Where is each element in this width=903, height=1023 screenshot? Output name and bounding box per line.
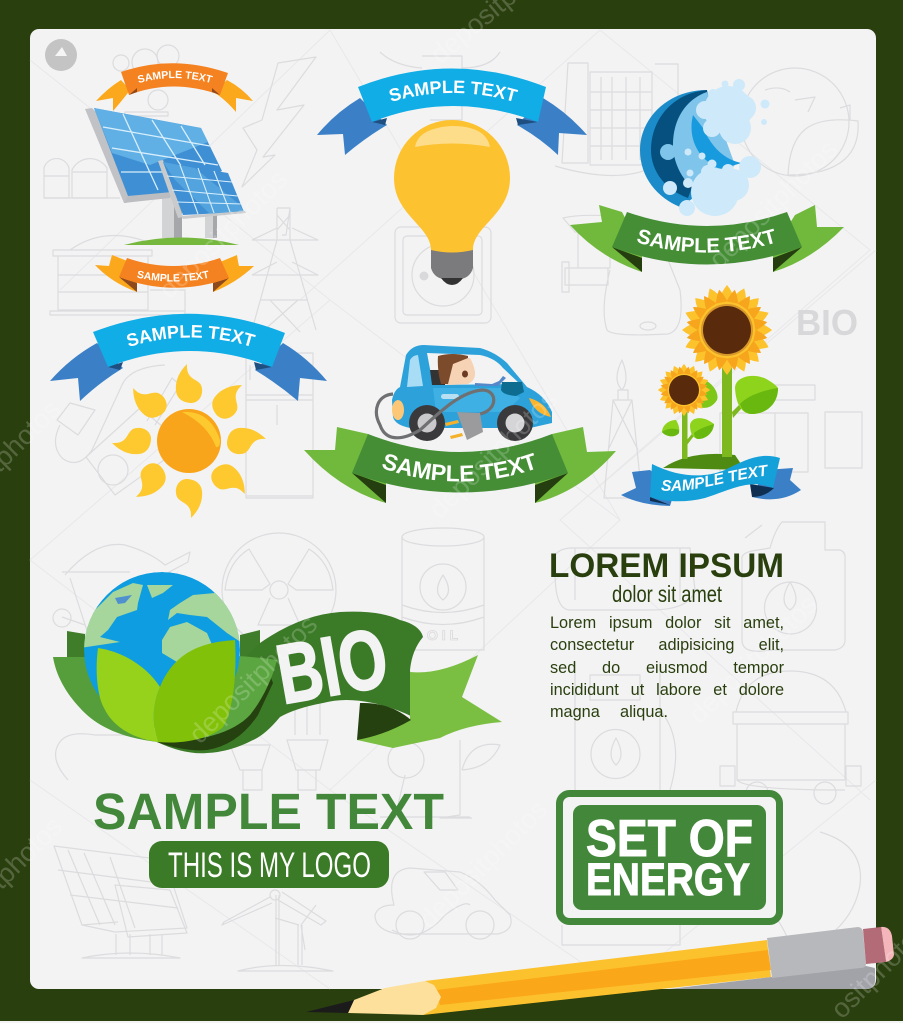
line art: compact bulb and spiral lamps [230, 660, 328, 790]
icon: electric car [376, 345, 552, 441]
ribbon: lower orange: SAMPLE TEXT [137, 270, 208, 282]
ribbon: top orange: SAMPLE TEXT [138, 70, 213, 82]
ribbon: top blue: SAMPLE TEXT [389, 80, 518, 101]
foam bubbles [663, 79, 770, 216]
ribbon tail [357, 655, 502, 748]
line art: wall socket [395, 227, 491, 323]
door handle [441, 394, 459, 399]
line art: big bulb outline [562, 832, 860, 945]
ribbon: center green: SAMPLE TEXT [382, 452, 534, 482]
line art: oil barrel [402, 528, 484, 650]
line art: radiation symbol [222, 533, 336, 647]
icon: sun [112, 364, 266, 518]
line art: factory building [555, 63, 678, 176]
watermark text: depositphotos [703, 134, 843, 274]
left and right wings [53, 657, 158, 742]
ribbon: center green [304, 427, 616, 503]
front window [427, 353, 520, 385]
ferrule [767, 927, 866, 978]
line art: plug and power strip [55, 365, 185, 495]
watermark text: depositphotos [423, 384, 563, 524]
sun rays [176, 364, 202, 403]
line art: grinder machine [562, 215, 681, 335]
ribbon: lower orange [95, 255, 254, 292]
watermark text: depositphotos [413, 794, 553, 934]
line art: fuel pump [575, 662, 676, 815]
body text block: incididunt ut labore et dolore [550, 681, 784, 699]
line art: solar panel outline [54, 846, 187, 958]
ribbon: top green [570, 205, 844, 272]
wave layers [640, 90, 720, 207]
lights [392, 400, 404, 420]
icon: sunflowers [658, 285, 778, 470]
pencil [306, 927, 894, 1015]
ribbon: top green: SAMPLE TEXT [637, 228, 774, 253]
ribbon: left blue [50, 314, 327, 401]
line art: oil barrel: OIL [427, 627, 458, 643]
body text block: consectetur adipisicing elit, [550, 636, 784, 654]
ground [124, 238, 239, 245]
eraser [863, 927, 886, 964]
driver [430, 354, 506, 386]
heading: lorem ipsum: LOREM IPSUM [549, 547, 784, 585]
leaves [735, 376, 778, 414]
line art: canister [553, 522, 845, 651]
watermark text: depositphotos [153, 164, 293, 304]
charging cable and plug [376, 390, 494, 438]
side tabs [67, 630, 260, 658]
line art: pylon [252, 208, 318, 332]
line art: globe with leaf [741, 68, 858, 176]
line art: gas station bits [604, 360, 862, 498]
icon: water wave [640, 79, 770, 216]
body text block: magna aliqua. [550, 703, 668, 721]
icon: light bulb [394, 120, 510, 285]
line art: fridge [246, 353, 313, 498]
subheading: dolor sit amet [612, 581, 722, 607]
main ribbon [157, 612, 423, 753]
line art: BIO label: BIO [796, 302, 858, 343]
pencil body [423, 940, 771, 1015]
word BIO: BIO [270, 610, 394, 722]
dashboard [501, 382, 524, 396]
globe [78, 572, 245, 728]
ribbon dark shadow [157, 660, 273, 750]
large flower head [682, 285, 772, 375]
rear window [407, 355, 423, 387]
line art: lightning bolt [242, 57, 316, 187]
pencil lead [306, 1000, 354, 1013]
badge: set of energy: SET OF [586, 810, 753, 868]
body text block: sed do eiusmod tempor [550, 659, 784, 677]
ribbon: left blue: SAMPLE TEXT [127, 325, 256, 346]
line art: generator on wheels [720, 671, 861, 804]
line art: chimney behind blue ribbon [380, 52, 500, 120]
line art: small sunflower plant [380, 740, 500, 818]
pencil shadow [669, 966, 875, 989]
badge: set of energy: ENERGY [586, 854, 750, 905]
small flower head [658, 364, 710, 416]
watermark text: depositphotos [683, 589, 823, 729]
icon: top-left stock badge [45, 39, 77, 71]
car body [392, 345, 552, 428]
line art: electric car outline [375, 868, 511, 939]
panel stands [162, 195, 180, 238]
line art: clouds and domes behind solar panel [44, 45, 179, 198]
line art: wind turbines [222, 890, 333, 971]
ribbon: blue wave: SAMPLE TEXT [661, 464, 768, 492]
ribbon fold [357, 703, 411, 740]
line art: fuel can and hose [53, 544, 190, 780]
stems [722, 365, 732, 457]
logo pill [149, 841, 389, 888]
pencil wood tip [348, 981, 441, 1015]
small solar array [158, 160, 183, 218]
logo pill: THIS IS MY LOGO [168, 846, 371, 885]
line art: storage tank [50, 235, 185, 315]
ribbon: top blue [317, 68, 587, 155]
badge: set of energy [560, 794, 780, 922]
mound [663, 454, 745, 470]
ribbon: top orange [96, 63, 253, 112]
globe leaves [154, 640, 236, 743]
heading: sample text: SAMPLE TEXT [93, 783, 444, 840]
white bottom edge [0, 1021, 903, 1023]
sun disc [157, 409, 221, 473]
BIO globe logo [53, 572, 502, 753]
large solar array [85, 108, 177, 203]
ribbon: blue wave [621, 456, 801, 506]
icon: solar panel [85, 108, 246, 245]
body text block: Lorem ipsum dolor sit amet, [550, 614, 784, 632]
watermark text: depositphotos [183, 609, 323, 749]
wheels [409, 405, 445, 441]
body text block [550, 614, 784, 721]
